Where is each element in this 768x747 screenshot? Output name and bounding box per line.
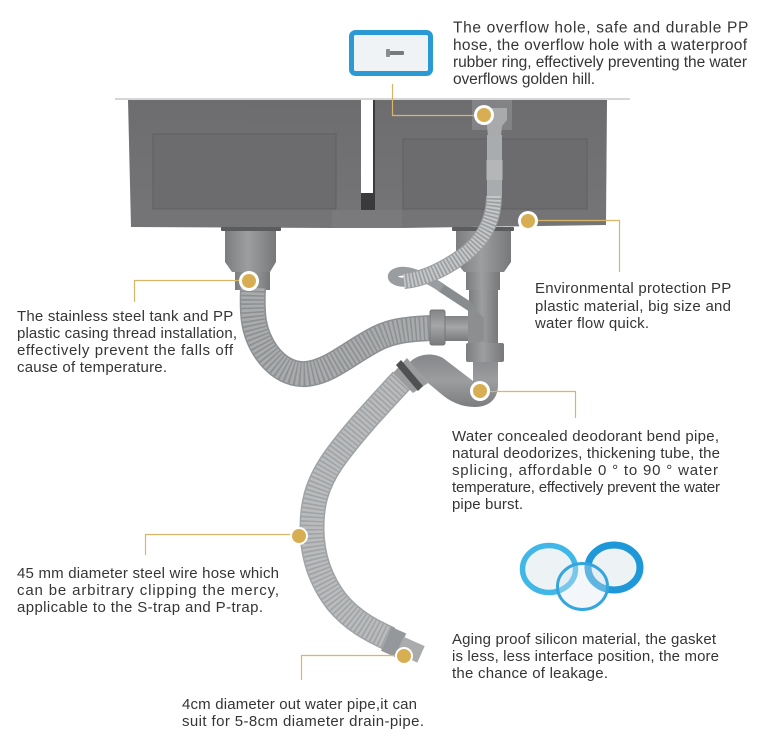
callout: overflow hole [392,20,753,125]
callout: thread installation [17,271,259,376]
deodorant trap bend [410,355,498,407]
icon: overflow gasket with screw [352,32,430,74]
text: thread installation: The stainless steel tank and PP [17,308,233,325]
callout: silicone gasket text: is less, less interface position, the more [452,648,719,665]
text: outlet pipe: suit for 5-8cm diameter drain-pipe. [182,713,424,730]
text: thread installation: effectively prevent the falls off [17,342,234,359]
overflow elbow [482,108,507,136]
text: overflow hole: overflows golden hill. [453,71,595,88]
overflow hose loop end [392,271,442,288]
T joint [430,302,504,362]
text: deodorant bend pipe: splicing, affordable 0 ° to 90 ° water [452,462,718,479]
right basin panel [403,139,587,209]
text: deodorant bend pipe: natural deodorizes, thickening tube, the [452,445,720,462]
text: steel wire hose: applicable to the S-trap and P-trap. [17,599,263,616]
text: deodorant bend pipe: Water concealed deodorant bend pipe, [452,428,719,445]
text: PP plastic material: water flow quick. [534,315,649,332]
text: deodorant bend pipe: pipe burst. [452,496,523,513]
icon: screw [386,49,404,57]
text: overflow hole: hose, the overflow hole with a waterproof [453,37,748,54]
trap collar [393,358,428,393]
callout: silicone gasket text: the chance of leakage. [452,665,608,682]
basin divider slot [332,100,402,228]
text: steel wire hose: 45 mm diameter steel wire hose which [17,565,279,582]
icon: silicone gasket rings [522,545,640,610]
overflow branch connector [440,287,472,308]
text: deodorant bend pipe: temperature, effectively prevent the water [452,479,720,496]
text: PP plastic material: plastic material, big size and [535,298,731,315]
callout: steel wire hose [17,528,307,616]
text: thread installation: plastic casing thread installation, [17,325,237,342]
sink basin [115,98,630,228]
callout: outlet pipe [182,648,424,730]
outlet nozzle [381,627,426,666]
right drain strainer and vertical pipe [452,227,514,346]
callout: deodorant bend pipe [452,381,724,513]
overflow plate [472,100,512,130]
text: overflow hole: rubber ring, effectively preventing the water [453,54,747,71]
text: steel wire hose: can be arbitrary clipping the mercy, [17,582,279,599]
overflow hose [404,135,494,281]
callout: PP plastic material [518,211,735,332]
left basin panel [153,134,336,209]
corrugated hose: left basin to T joint [253,288,432,374]
text: thread installation: cause of temperature. [17,359,167,376]
left drain strainer [221,227,281,290]
text: overflow hole: The overflow hole, safe and durable PP [453,20,748,36]
callout: silicone gasket text: Aging proof silicon material, the gasket [452,631,717,648]
text: PP plastic material: Environmental protection PP [535,280,731,297]
corrugated outlet hose [312,380,402,639]
text: outlet pipe: 4cm diameter out water pipe,it can [182,696,417,713]
